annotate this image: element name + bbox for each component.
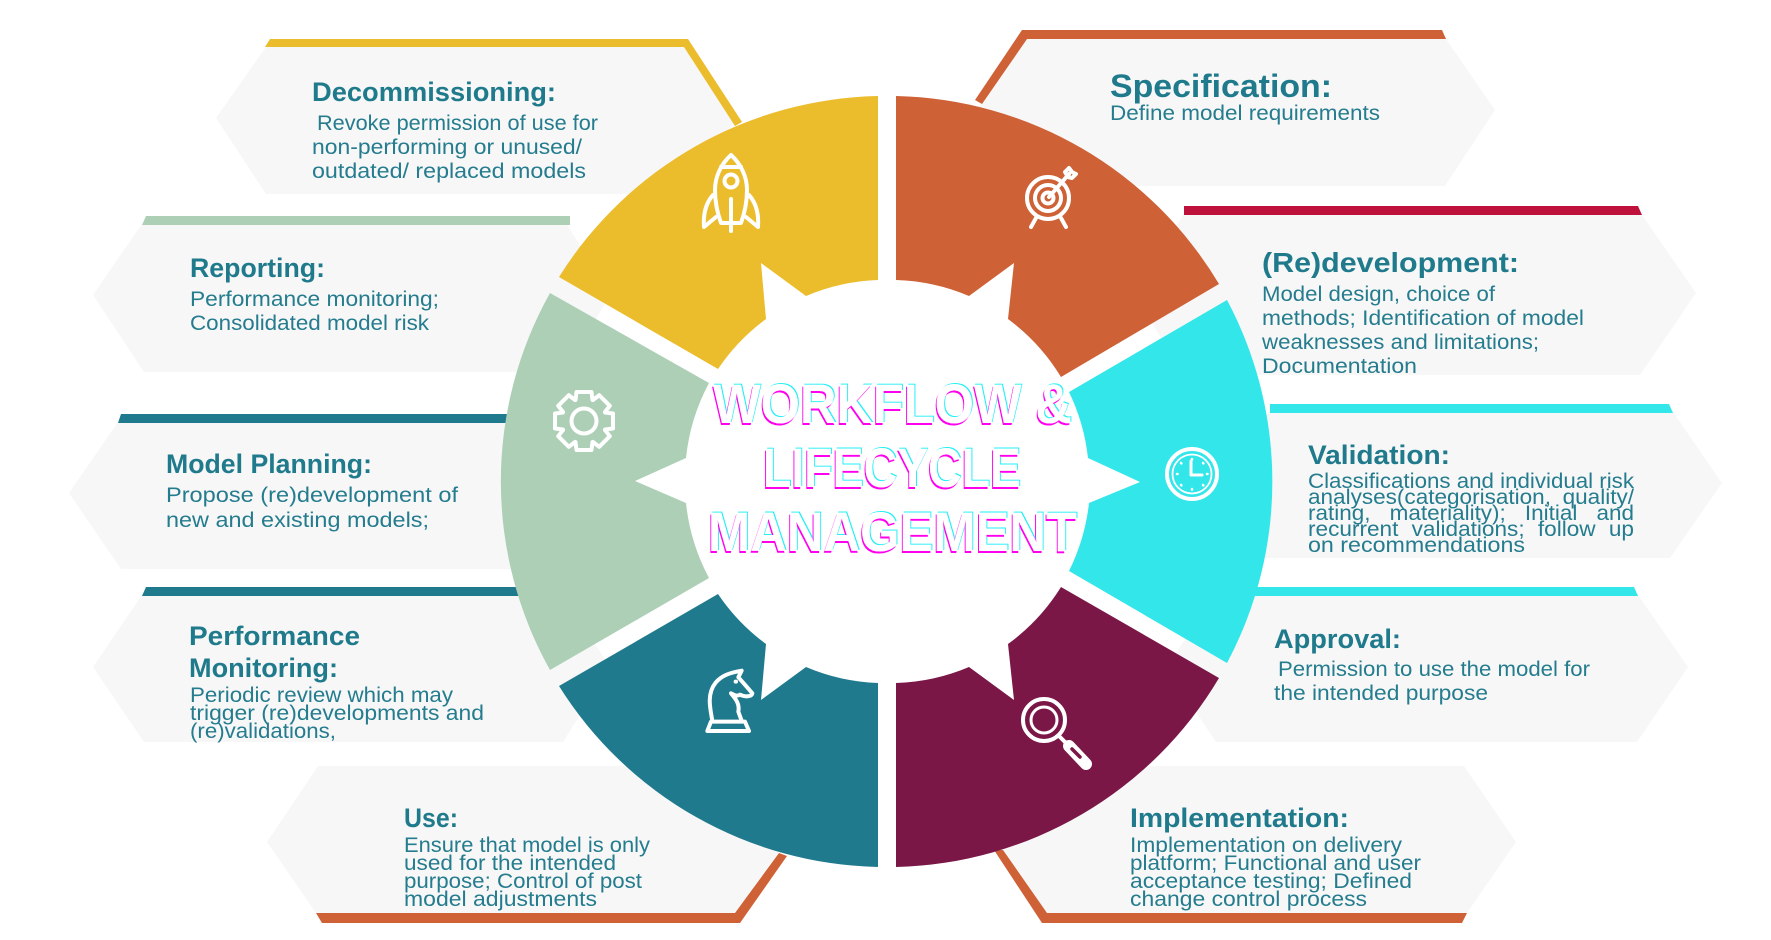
- body text: rating, materiality); Initial and: [1308, 502, 1634, 525]
- panel: Specification: [975, 30, 1495, 186]
- heading: Decommissioning:: [312, 77, 556, 107]
- body text: [404, 834, 651, 911]
- panel background: [1200, 412, 1722, 558]
- heading: [189, 621, 360, 683]
- title: WORKFLOW &: [713, 372, 1072, 435]
- panel: Approval: [1166, 587, 1688, 742]
- icon: chess knight: [707, 671, 752, 731]
- title: LIFECYCLE: [763, 436, 1021, 499]
- icon: target with arrow: [1027, 168, 1076, 227]
- accent bar: [1270, 404, 1673, 413]
- panel: Model Planning: [69, 414, 612, 569]
- title: [708, 372, 1077, 563]
- body text: platform; Functional and user: [1130, 852, 1421, 875]
- icon: clock: [1167, 449, 1217, 499]
- body text: Classifications and individual risk: [1308, 470, 1635, 493]
- body text: on recommendations: [1308, 534, 1525, 557]
- body text: methods; Identification of model: [1262, 307, 1584, 330]
- heading: Model Planning:: [166, 449, 372, 479]
- body text: model adjustments: [404, 888, 597, 911]
- body text: recurrent validations; follow up: [1308, 518, 1634, 541]
- body text: [1261, 283, 1584, 378]
- accent bar: [265, 39, 742, 126]
- body text: [166, 484, 458, 532]
- accent bar: [1200, 587, 1638, 596]
- heading: Reporting:: [190, 253, 325, 283]
- body text: the intended purpose: [1274, 682, 1488, 705]
- panel: Decommissioning: [216, 39, 742, 194]
- body text: Revoke permission of use for: [317, 112, 598, 135]
- panel: Implementation: [994, 766, 1516, 923]
- body text: [190, 684, 484, 743]
- body text: [1274, 658, 1590, 705]
- icon: magnifying glass: [1023, 699, 1086, 764]
- body text: [190, 288, 439, 335]
- panel background: [976, 39, 1495, 186]
- wheel segment: Decommissioning: [559, 96, 878, 369]
- accent bar: [316, 853, 787, 923]
- wheel segment: Validation: [1069, 300, 1272, 663]
- wheel segment: Specification: [896, 96, 1219, 377]
- body text: Performance monitoring;: [190, 288, 439, 311]
- body text: [1308, 470, 1635, 557]
- panel: Performance Monitoring: [93, 587, 610, 743]
- heading: Approval:: [1274, 624, 1401, 654]
- accent bar: [142, 587, 530, 596]
- panel: Reporting: [93, 216, 610, 372]
- body text: Implementation on delivery: [1130, 834, 1403, 857]
- segment wheel: [501, 96, 1272, 867]
- body text: purpose; Control of post: [404, 870, 642, 893]
- body text: Model design, choice of: [1262, 283, 1495, 306]
- panel background: [216, 47, 737, 194]
- accent bar: [1184, 206, 1642, 215]
- heading: Monitoring:: [189, 653, 338, 683]
- body text: new and existing models;: [166, 509, 429, 532]
- accent bar: [975, 30, 1446, 104]
- accent bar: [118, 414, 520, 423]
- heading: Use:: [404, 803, 458, 833]
- icon: rocket: [704, 155, 758, 231]
- panel background: [69, 422, 612, 569]
- accent bar: [142, 216, 570, 225]
- panel background: [995, 766, 1516, 913]
- body text: Consolidated model risk: [190, 312, 430, 335]
- body text: Ensure that model is only: [404, 834, 651, 857]
- body text: trigger (re)developments and: [190, 702, 484, 725]
- wheel segment: Implementation: [896, 587, 1219, 867]
- panel: Validation: [1200, 404, 1722, 558]
- panel: (Re)development: [1134, 206, 1696, 378]
- wheel segment: Use: [559, 594, 878, 867]
- body text: Permission to use the model for: [1278, 658, 1590, 681]
- body text: Documentation: [1262, 355, 1417, 378]
- panel: Use: [267, 766, 787, 923]
- body text: outdated/ replaced models: [312, 160, 586, 183]
- body text: used for the intended: [404, 852, 616, 875]
- body text: change control process: [1130, 888, 1367, 911]
- accent bar: [994, 850, 1467, 923]
- body text: weaknesses and limitations;: [1261, 331, 1539, 354]
- body text: Periodic review which may: [190, 684, 454, 707]
- heading: Specification:: [1110, 68, 1332, 104]
- body text: (re)validations,: [190, 720, 336, 743]
- heading: Implementation:: [1130, 803, 1349, 833]
- icon: gear: [555, 392, 613, 450]
- body text: acceptance testing; Defined: [1130, 870, 1412, 893]
- panel background: [93, 595, 610, 742]
- body text: [312, 112, 598, 183]
- panel background: [267, 766, 786, 913]
- wheel segment: Reporting and planning: [501, 293, 709, 670]
- body text: Define model requirements: [1110, 102, 1380, 125]
- body text: Propose (re)development of: [166, 484, 458, 507]
- title: MANAGEMENT: [708, 500, 1077, 563]
- heading: Performance: [189, 621, 360, 651]
- panel background: [93, 224, 610, 372]
- panel background: [1134, 215, 1696, 375]
- body text: non-performing or unused/: [312, 136, 582, 159]
- heading: Validation:: [1308, 440, 1450, 470]
- panel background: [1166, 595, 1688, 742]
- body text: analyses(categorisation, quality/: [1308, 486, 1634, 509]
- heading: (Re)development:: [1262, 247, 1519, 278]
- body text: [1130, 834, 1421, 911]
